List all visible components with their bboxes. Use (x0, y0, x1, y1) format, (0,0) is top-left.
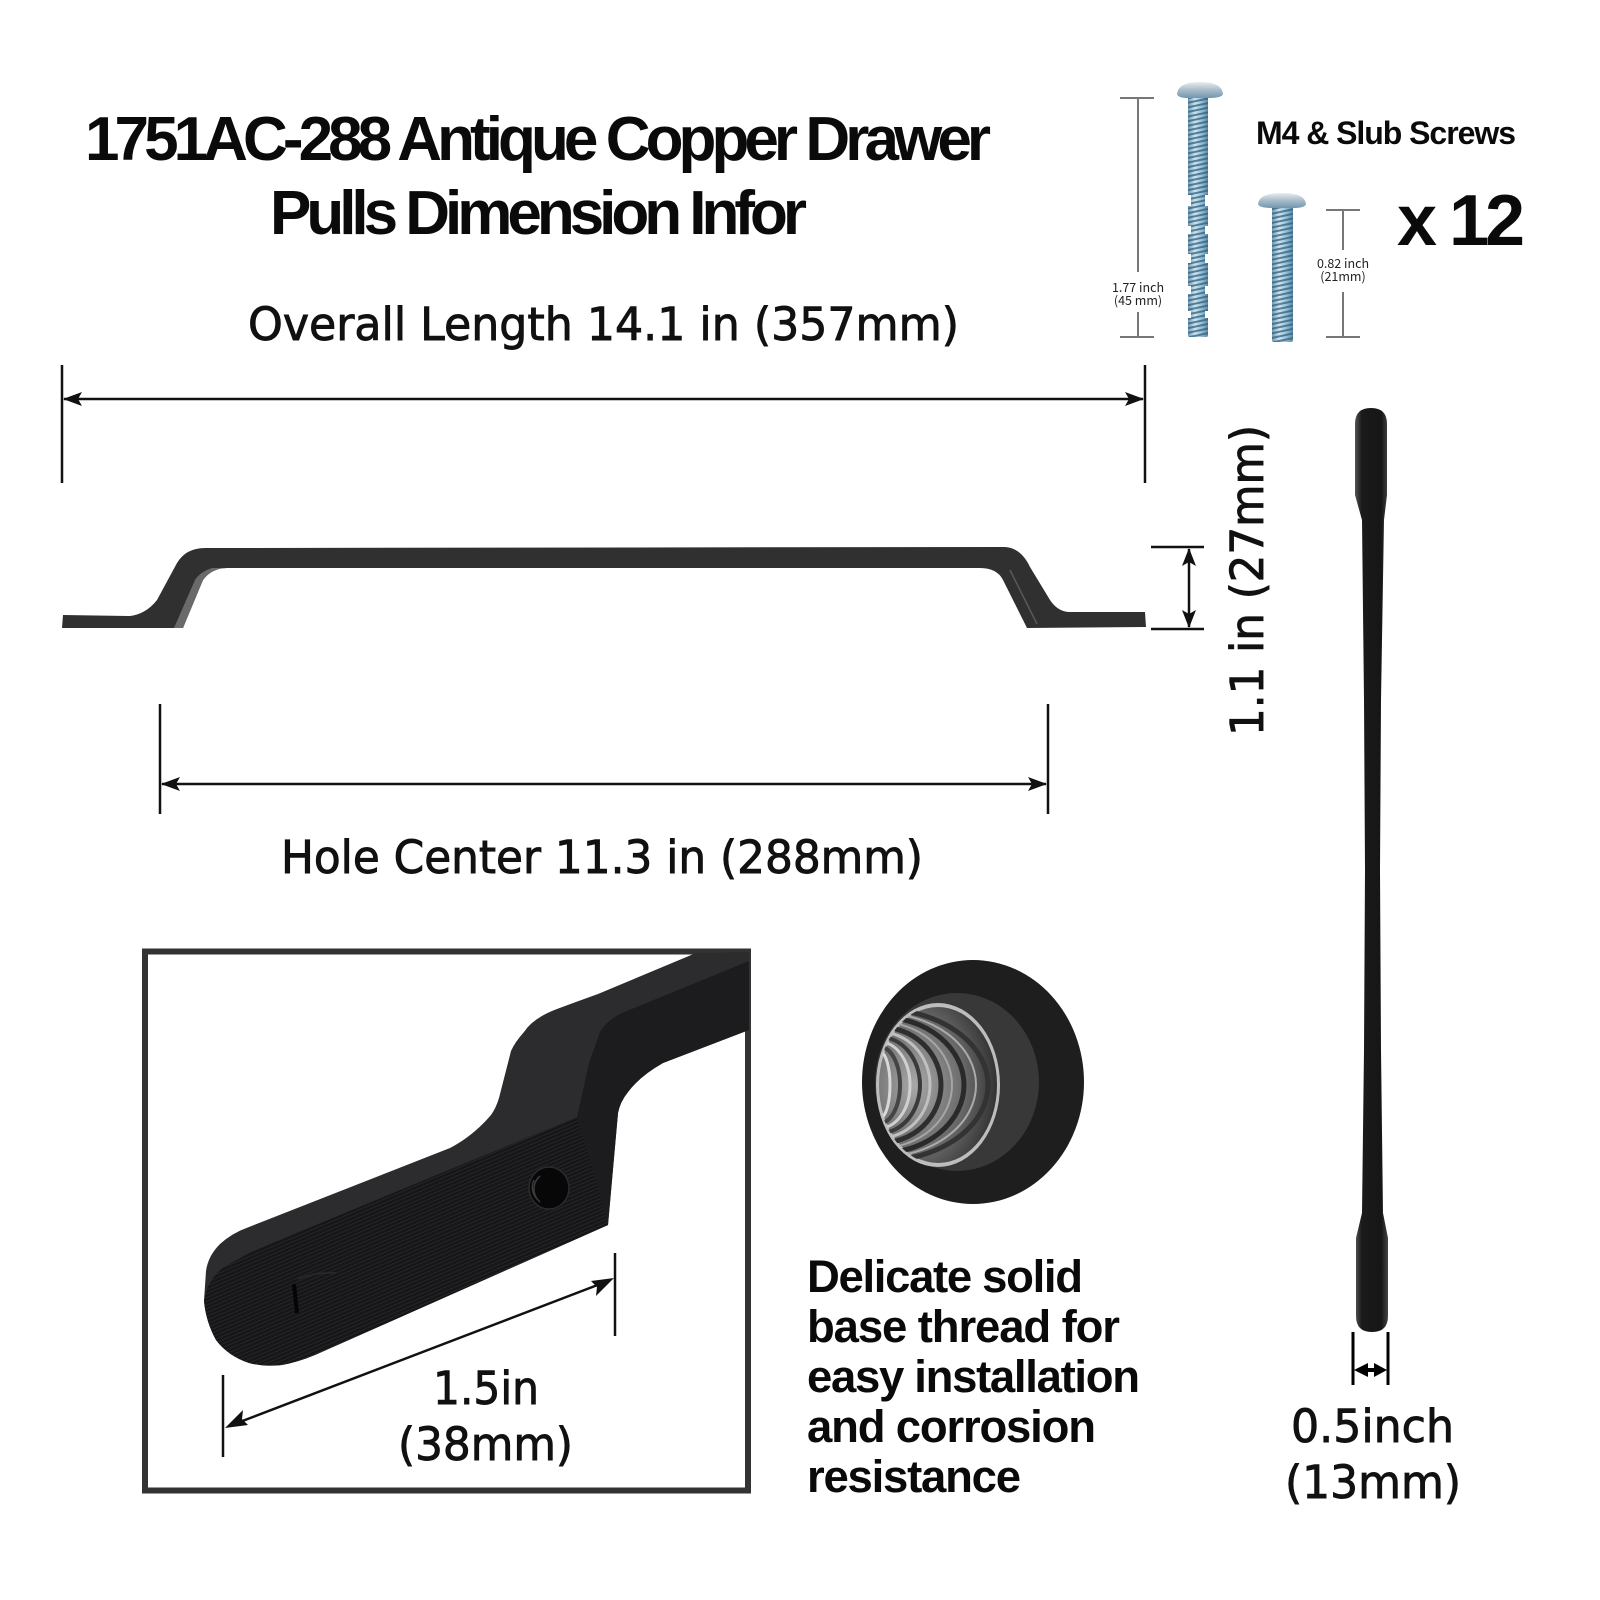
close-up label: (38mm) (398, 1418, 573, 1471)
title (85, 105, 991, 248)
icon: slot (294, 1273, 336, 1313)
hole center dimension (160, 704, 1048, 814)
overall length label: Overall Length 14.1 in (357mm) (248, 298, 959, 351)
short screw dimension (1317, 210, 1369, 337)
long screw dimension: 1.77 inch (1112, 277, 1164, 296)
icon: short screw (1258, 193, 1306, 342)
side view handle (1355, 408, 1388, 1332)
close-up handle (204, 952, 749, 1366)
long screw dimension (1112, 98, 1164, 337)
short screw dimension: 0.82 inch (1317, 253, 1369, 272)
close-up dimension (223, 1253, 615, 1457)
icon: long screw (1177, 82, 1223, 337)
width label (1285, 1400, 1461, 1509)
overall length dimension (62, 365, 1145, 483)
thread description: base thread for (807, 1301, 1120, 1352)
close-up label (398, 1362, 573, 1471)
height dimension (1151, 547, 1204, 629)
hole center label: Hole Center 11.3 in (288mm) (281, 831, 923, 884)
icon: threaded bore (862, 960, 1084, 1204)
width label: 0.5inch (1291, 1400, 1454, 1453)
title: 1751AC-288 Antique Copper Drawer (85, 105, 991, 174)
title: Pulls Dimension Infor (270, 179, 807, 248)
width label: (13mm) (1285, 1456, 1461, 1509)
screws label: M4 & Slub Screws (1256, 115, 1516, 151)
close-up label: 1.5in (433, 1362, 539, 1415)
long screw dimension: (45 mm) (1114, 290, 1162, 309)
height label: 1.1 in (27mm) (1221, 425, 1274, 736)
short screw dimension: (21mm) (1320, 266, 1366, 285)
thread description: Delicate solid (807, 1251, 1083, 1302)
width dimension (1353, 1332, 1388, 1385)
panel: close-up of handle end (145, 952, 749, 1490)
thread description: easy installation (807, 1351, 1140, 1402)
thread description (807, 1251, 1140, 1502)
quantity: x 12 (1397, 181, 1525, 261)
panel: screws (1112, 82, 1525, 342)
icon: screw hole (529, 1167, 569, 1209)
front view handle (62, 547, 1146, 628)
thread description: and corrosion (807, 1401, 1096, 1452)
thread description: resistance (807, 1451, 1021, 1502)
